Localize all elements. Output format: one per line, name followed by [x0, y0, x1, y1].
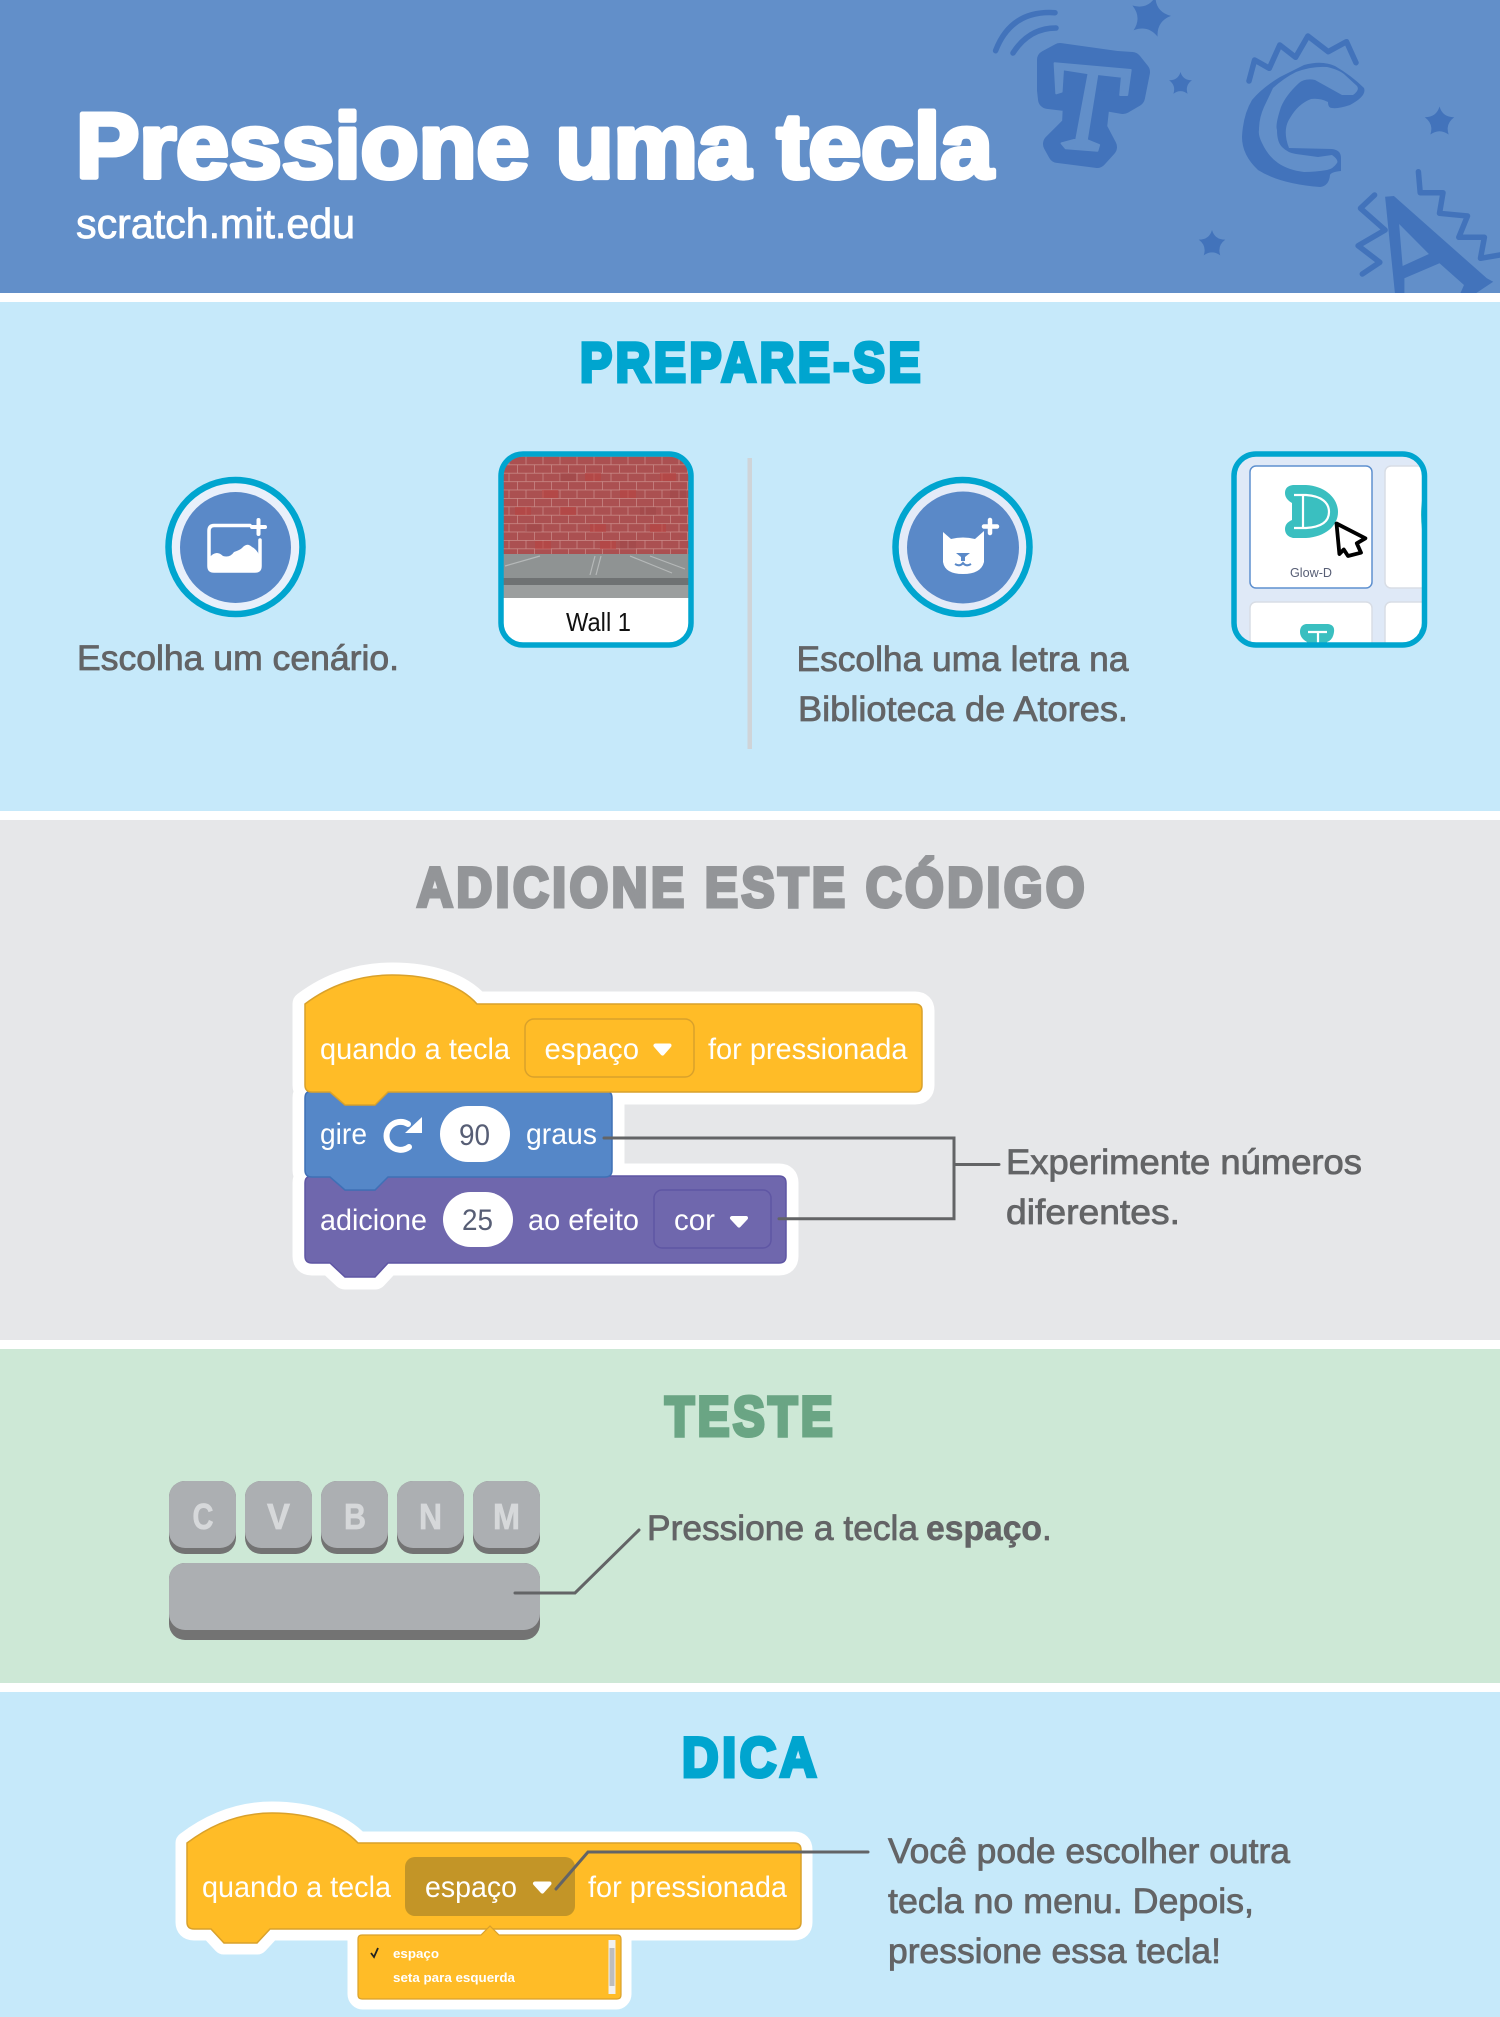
block: adicione ao efeito: 25: [462, 1204, 493, 1237]
key: M: [473, 1481, 540, 1554]
instruction: choose backdrop: Escolha um cenário.: [77, 639, 399, 678]
block: gire graus: graus: [526, 1118, 597, 1151]
block: quando a tecla for pressionada: for pressionada: [708, 1033, 908, 1066]
callout text: press the space key: espaço: [926, 1509, 1042, 1548]
key: B: B: [344, 1496, 366, 1537]
divider: [748, 458, 752, 749]
block: quando a tecla for pressionada: quando a tecla: [320, 1033, 511, 1066]
icon: choose sprite button: [896, 480, 1030, 614]
block: quando a tecla: [187, 1813, 801, 1943]
panel: adicione este código: [0, 820, 1500, 1340]
block: quando a tecla for pressionada: [305, 975, 922, 1105]
key-press block with open menu: [187, 1813, 801, 1999]
block: quando a tecla: espaço: [425, 1871, 517, 1904]
block: gire graus: gire: [320, 1118, 367, 1151]
block: adicione ao efeito: cor: [674, 1204, 715, 1237]
icon: choose backdrop button: [168, 480, 302, 614]
card: wall 1 backdrop: [501, 454, 691, 645]
card: sprite library: [1231, 451, 1428, 648]
key: B: [321, 1481, 388, 1554]
key: N: [397, 1481, 464, 1554]
key: V: [245, 1481, 312, 1554]
instruction: choose letter sprite: [796, 640, 1129, 729]
callout line: space bar: [515, 1530, 639, 1593]
callout text: press the space key: [647, 1509, 1052, 1548]
key: V: V: [267, 1496, 290, 1537]
label: glow-d: Glow-D: [1290, 565, 1332, 580]
block: gire graus: [305, 1091, 612, 1190]
heading: adicione este código: ADICIONE ESTE CÓDIGO: [417, 856, 1088, 918]
callout text: press the space key: .: [1042, 1509, 1052, 1548]
block: quando a tecla: quando a tecla: [202, 1871, 392, 1904]
dropdown menu: espaço: [393, 1946, 439, 1961]
key: C: [169, 1481, 236, 1554]
icon: mouse cursor: [1336, 524, 1365, 556]
icon: letter A decoration: [1358, 172, 1500, 293]
block: adicione ao efeito: adicione: [320, 1204, 427, 1237]
key: space bar: [169, 1563, 540, 1640]
callout text: try different numbers: diferentes.: [1006, 1193, 1180, 1232]
key: M: M: [493, 1496, 520, 1537]
callout line: dropdown arrow: [556, 1852, 868, 1889]
heading: teste: TESTE: [665, 1384, 836, 1448]
callout text: try different numbers: [1006, 1143, 1362, 1232]
code blocks stack: [305, 975, 922, 1277]
title: Pressione uma tecla: [76, 96, 994, 198]
label: wall 1: Wall 1: [566, 607, 631, 637]
callout text: press the space key: Pressione a tecla: [647, 1509, 919, 1548]
heading: prepare-se: PREPARE-SE: [580, 330, 924, 394]
callout text: choose another key: [888, 1832, 1291, 1971]
icon: check mark: [371, 1948, 378, 1957]
icon: letter T decoration: [996, 13, 1140, 158]
callout lines: [604, 1138, 999, 1219]
key: C: C: [192, 1496, 214, 1537]
dropdown menu: [358, 1926, 621, 1999]
panel: header: [0, 0, 1500, 293]
block: adicione ao efeito: [305, 1176, 786, 1277]
keyboard keys: [169, 1481, 540, 1640]
panel: dica: [0, 1692, 1500, 2017]
callout text: choose another key: tecla no menu. Depois,: [888, 1882, 1254, 1921]
icon: clockwise arrow: [387, 1117, 422, 1150]
block: adicione ao efeito: ao efeito: [528, 1204, 639, 1237]
icon: stars: [1126, 0, 1454, 255]
instruction: choose letter sprite: Escolha uma letra na: [796, 640, 1129, 679]
dropdown menu: seta para esquerda: [393, 1970, 516, 1985]
panel: prepare-se: [0, 302, 1500, 811]
panel: teste: [0, 1349, 1500, 1683]
block: gire graus: 90: [459, 1119, 490, 1152]
website url: scratch.mit.edu: [76, 200, 355, 247]
callout text: try different numbers: Experimente números: [1006, 1143, 1362, 1182]
instruction: choose letter sprite: Biblioteca de Atores.: [798, 690, 1128, 729]
block: quando a tecla for pressionada: espaço: [544, 1033, 639, 1066]
heading: dica: DICA: [682, 1726, 820, 1788]
block: quando a tecla: for pressionada: [588, 1871, 788, 1904]
callout text: choose another key: pressione essa tecla!: [888, 1932, 1221, 1971]
callout text: choose another key: Você pode escolher outra: [888, 1832, 1291, 1871]
key: N: N: [419, 1496, 442, 1537]
icon: letter C decoration: [1242, 36, 1364, 187]
